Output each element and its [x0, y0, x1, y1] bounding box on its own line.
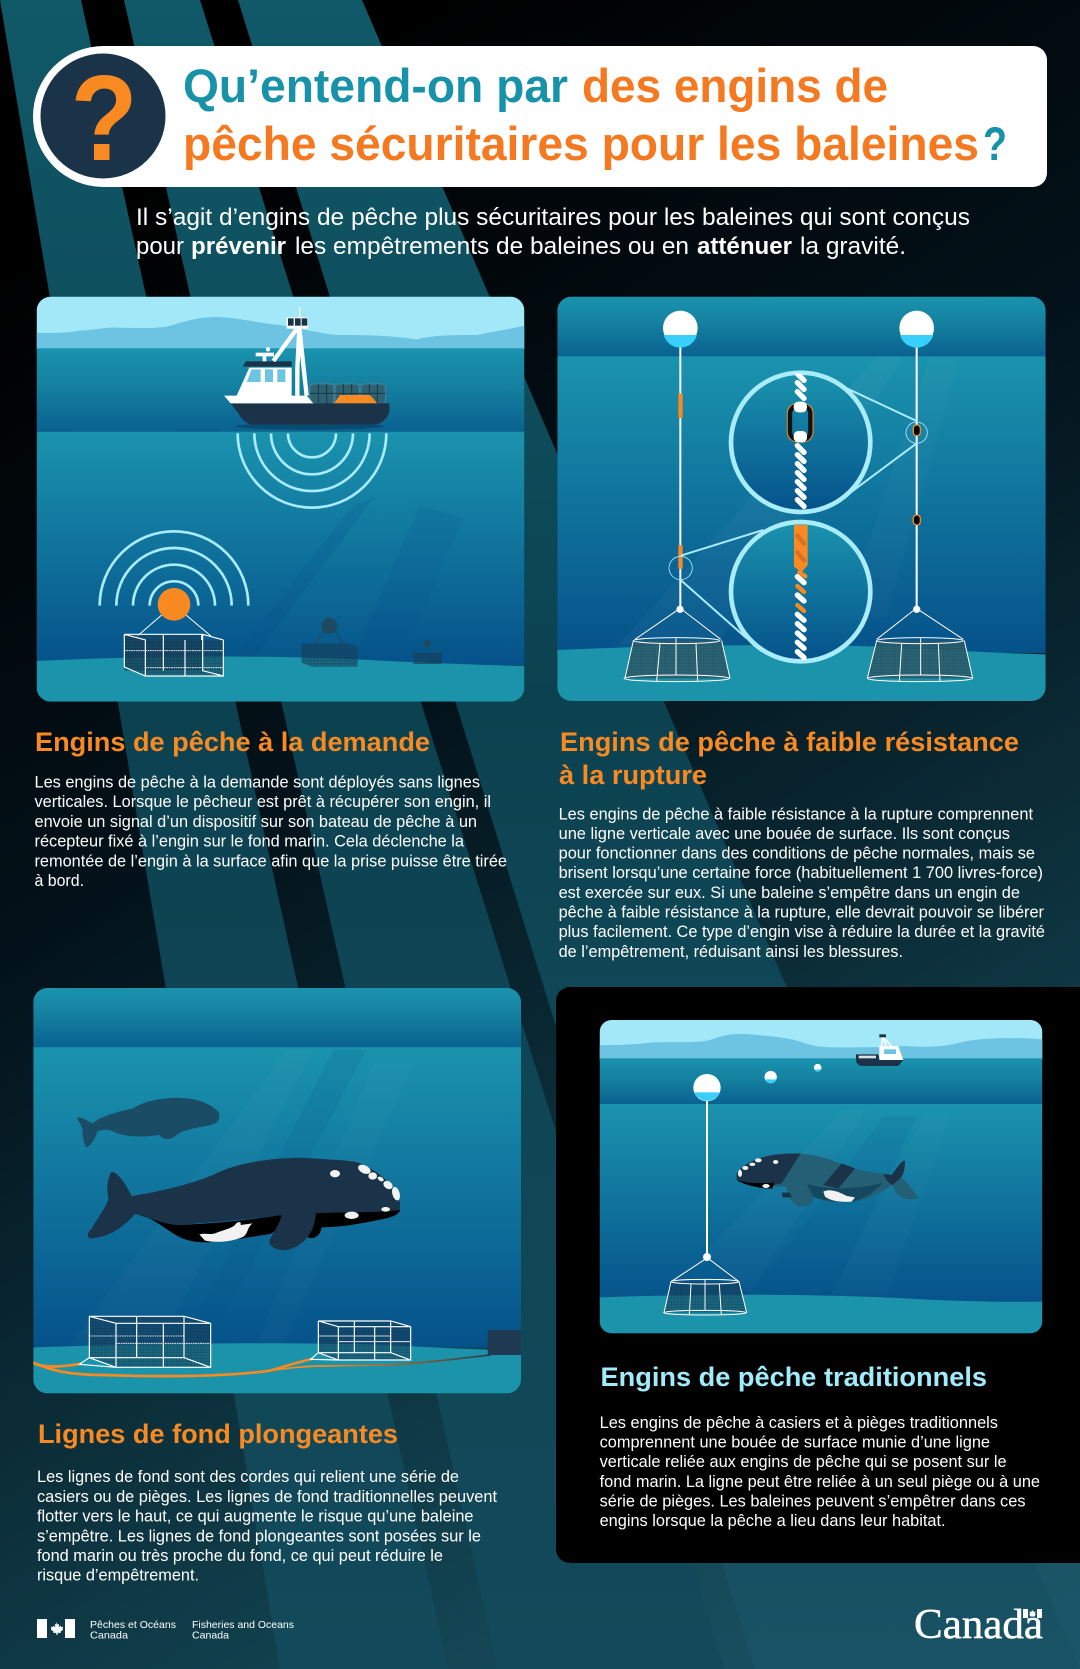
footer: department signature: Fisheries and Oceans [192, 1619, 294, 1631]
title banner [33, 46, 1047, 187]
callout: weak link [731, 373, 870, 512]
callout lines [681, 388, 917, 638]
title text: des engins de [582, 59, 888, 112]
title text: Qu’entend-on par [183, 59, 568, 112]
intro text: les empêtrements de baleines ou en [295, 233, 689, 260]
icon: right conical trap [867, 606, 973, 682]
heading: low breaking strength gear: à la rupture [559, 760, 707, 790]
icon: fishing boat [224, 308, 389, 430]
text: sinking groundline: Les lignes de fond sont des cordes qui relient une série de [37, 1468, 459, 1486]
text: traditional gear: engins lorsque la pêche a lieu dans leur habitat. [600, 1512, 946, 1530]
traditional gear illustration [600, 1020, 1042, 1333]
icon: conical trap [664, 1259, 747, 1315]
text: traditional gear: série de pièges. Les baleines peuvent s’empêtrer dans ces [600, 1492, 1026, 1510]
icon: left conical trap [624, 606, 730, 682]
text: on-demand gear: à bord. [34, 872, 84, 890]
text: low breaking strength gear: Les engins de pêche à faible résistance à la rupture comprennent [559, 805, 1033, 823]
icon: question mark [40, 50, 166, 186]
title text: ? [983, 117, 1007, 170]
heading: on-demand gear: Engins de pêche à la demande [35, 727, 430, 757]
seabed [33, 1343, 521, 1393]
text: sinking groundline: casiers ou de pièges. Les lignes de fond traditionnelles peuvent [37, 1488, 497, 1506]
text: traditional gear: Les engins de pêche à casiers et à pièges traditionnels [600, 1414, 998, 1432]
footer: department signature [37, 1619, 294, 1642]
intro text: atténuer [697, 233, 792, 260]
text: on-demand gear: remontée de l’engin à la surface afin que la prise puisse être tirée [34, 852, 507, 870]
intro text: la gravité. [800, 233, 906, 260]
footer: department signature: Canada [192, 1630, 229, 1642]
panel: traditional gear card [556, 987, 1080, 1563]
groundline rope [33, 1355, 490, 1376]
callout: weak rope [731, 522, 870, 661]
text: on-demand gear: Les engins de pêche à la demande sont déployés sans lignes [34, 774, 480, 792]
icon: distant whale [77, 1098, 219, 1148]
icon: second trap [311, 1321, 411, 1360]
panel: low breaking strength gear illustration [557, 297, 1046, 701]
text: sinking groundline: risque d’empêtrement. [37, 1567, 199, 1585]
text: low breaking strength gear: est exercée sur eux. Si une baleine s’empêtre dans un engin de [559, 884, 1020, 902]
intro text: Il s’agit d’engins de pêche plus sécuritaires pour les baleines qui sont conçus [136, 204, 970, 231]
footer: department signature: Canada [90, 1630, 128, 1642]
title text [183, 59, 1007, 170]
icon: Canadian flag [37, 1619, 75, 1638]
text: low breaking strength gear: brisent lorsqu’une certaine force (habituellement 1 700 livres-force) [559, 864, 1043, 882]
icon: buoy and line [693, 1074, 721, 1261]
footer: department signature: Pêches et Océans [90, 1619, 176, 1631]
seabed [557, 645, 1046, 701]
icon: distant trap [302, 618, 358, 667]
heading: low breaking strength gear: Engins de pêche à faible résistance [560, 727, 1019, 757]
signal: receiver rings [100, 531, 248, 606]
text: sinking groundline: fond marin ou très proche du fond, ce qui peut réduire le [37, 1547, 443, 1565]
text: low breaking strength gear: pêche à faible résistance à la rupture, elle devrait pouvoir se libérer [559, 904, 1045, 922]
text: low breaking strength gear: pour fonctionner dans des conditions de pêche normales, mais se [559, 844, 1035, 862]
text: on-demand gear: récepteur fixé à l’engin sur le fond marin. Cela déclenche la [34, 833, 465, 851]
text: on-demand gear [34, 774, 507, 890]
icon: entangled whale [737, 1153, 918, 1207]
text: on-demand gear: verticales. Lorsque le pêcheur est prêt à récupérer son engin, il [34, 793, 491, 811]
icon: distant third trap [488, 1330, 524, 1355]
panel: on-demand gear illustration [37, 297, 524, 702]
icon: drifting buoys [764, 1064, 821, 1083]
right buoy line [899, 311, 934, 608]
text: low breaking strength gear: une ligne verticale avec une bouée de surface. Ils sont conçus [559, 825, 1010, 843]
icon: first trap [79, 1316, 211, 1367]
heading: traditional gear: Engins de pêche traditionnels [600, 1362, 987, 1392]
icon: far trap [413, 640, 442, 664]
text: traditional gear [600, 1414, 1040, 1530]
heading: sinking groundline: Lignes de fond plongeantes [38, 1419, 398, 1449]
intro text: prévenir [191, 233, 286, 260]
icon: question mark: ? [70, 50, 138, 186]
text: low breaking strength gear [559, 805, 1045, 961]
seabed [600, 1295, 1042, 1333]
text: traditional gear: verticale reliée aux engins de pêche qui se posent sur le [600, 1453, 1007, 1471]
text: traditional gear: fond marin. La ligne peut être reliée à un seul piège ou à une [600, 1473, 1040, 1491]
text: low breaking strength gear: plus facilement. Ce type d’engin vise à réduire la durée et la gravité [559, 923, 1045, 941]
signal: boat sonar rings [238, 433, 386, 508]
text: on-demand gear: envoie un signal d’un dispositif sur son bateau de pêche à un [34, 813, 477, 831]
text: traditional gear: comprennent une bouée de surface munie d’une ligne [600, 1434, 990, 1452]
heading: low breaking strength gear [559, 727, 1019, 790]
intro text: pour [136, 233, 184, 260]
text: low breaking strength gear: de l’empêtrement, réduisant ainsi les blessures. [559, 943, 903, 961]
icon: receiver and trap [124, 588, 223, 676]
title text: pêche sécuritaires pour les baleines [183, 117, 979, 170]
icon: right whale [88, 1158, 401, 1250]
seabed [37, 656, 524, 702]
panel: sinking groundline illustration [33, 988, 524, 1393]
left buoy line [663, 311, 698, 608]
intro text [136, 204, 970, 260]
icon: distant boat [856, 1034, 903, 1066]
text: sinking groundline: s’empêtre. Les lignes de fond plongeantes sont posées sur le [37, 1527, 481, 1545]
footer: Canada wordmark: Canada [914, 1602, 1043, 1648]
text: sinking groundline [37, 1468, 497, 1585]
text: sinking groundline: flotter vers le haut, ce qui augmente le risque qu’une baleine [37, 1508, 474, 1526]
